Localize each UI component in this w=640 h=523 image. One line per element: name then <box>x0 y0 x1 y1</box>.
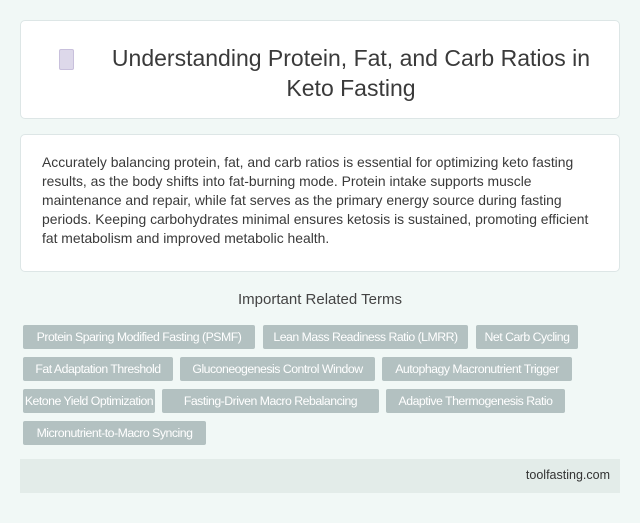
tags: Fat Adaptation Threshold <box>35 362 161 376</box>
tags: Fasting-Driven Macro Rebalancing <box>184 394 357 408</box>
tags: Protein Sparing Modified Fasting (PSMF) <box>37 330 241 344</box>
tags: Lean Mass Readiness Ratio (LMRR) <box>273 330 458 344</box>
footer <box>20 459 620 493</box>
tags: Net Carb Cycling <box>485 330 569 344</box>
title: Understanding Protein, Fat, and Carb Ratios in Keto Fasting <box>112 45 590 101</box>
header card <box>20 20 620 119</box>
section heading: Important Related Terms <box>238 291 402 308</box>
tags: Gluconeogenesis Control Window <box>192 362 363 376</box>
footer text: toolfasting.com <box>526 468 610 482</box>
tags: Micronutrient-to-Macro Syncing <box>37 426 192 440</box>
tags: Ketone Yield Optimization <box>25 394 153 408</box>
tags: Autophagy Macronutrient Trigger <box>395 362 559 376</box>
description card <box>20 134 620 272</box>
description text: Accurately balancing protein, fat, and carb ratios is essential for optimizing keto fasting results, as the body shifts into fat-burning mode. Protein intake supports muscle maintenance and repair, while fat serves as the primary energy source during fasting periods. Keeping carbohydrates minimal ensures ketosis is sustained, promoting efficient fat metabolism and improved metabolic health. <box>42 154 588 246</box>
tags: Adaptive Thermogenesis Ratio <box>399 394 552 408</box>
icon: scroll <box>59 49 74 70</box>
